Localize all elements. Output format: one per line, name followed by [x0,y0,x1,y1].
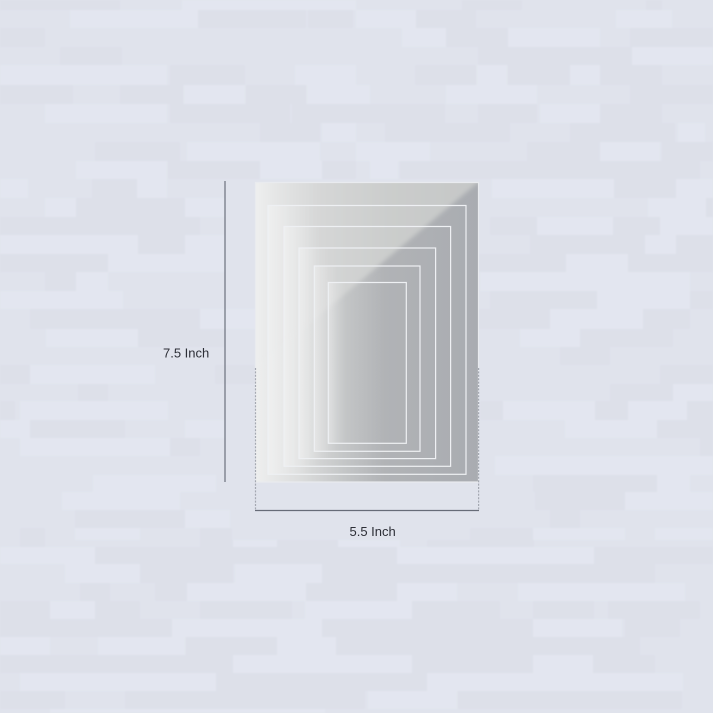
sheet outline 3 [299,248,436,459]
panel base [256,182,478,482]
left dashed guide [254,368,256,510]
sheet outline 2 [284,226,451,466]
right dashed guide [478,368,480,510]
sheet outline 1 [268,206,466,474]
width dimension line [255,510,479,512]
panel: layered acrylic sheets [255,182,479,482]
panel edge [256,182,478,482]
sheet outline 5 [328,282,406,443]
height dimension line [224,181,226,482]
width label: 5.5 Inch [350,524,396,539]
height label: 7.5 Inch [163,346,209,360]
glass reflection [330,183,478,298]
sheet outline 4 [314,266,420,451]
